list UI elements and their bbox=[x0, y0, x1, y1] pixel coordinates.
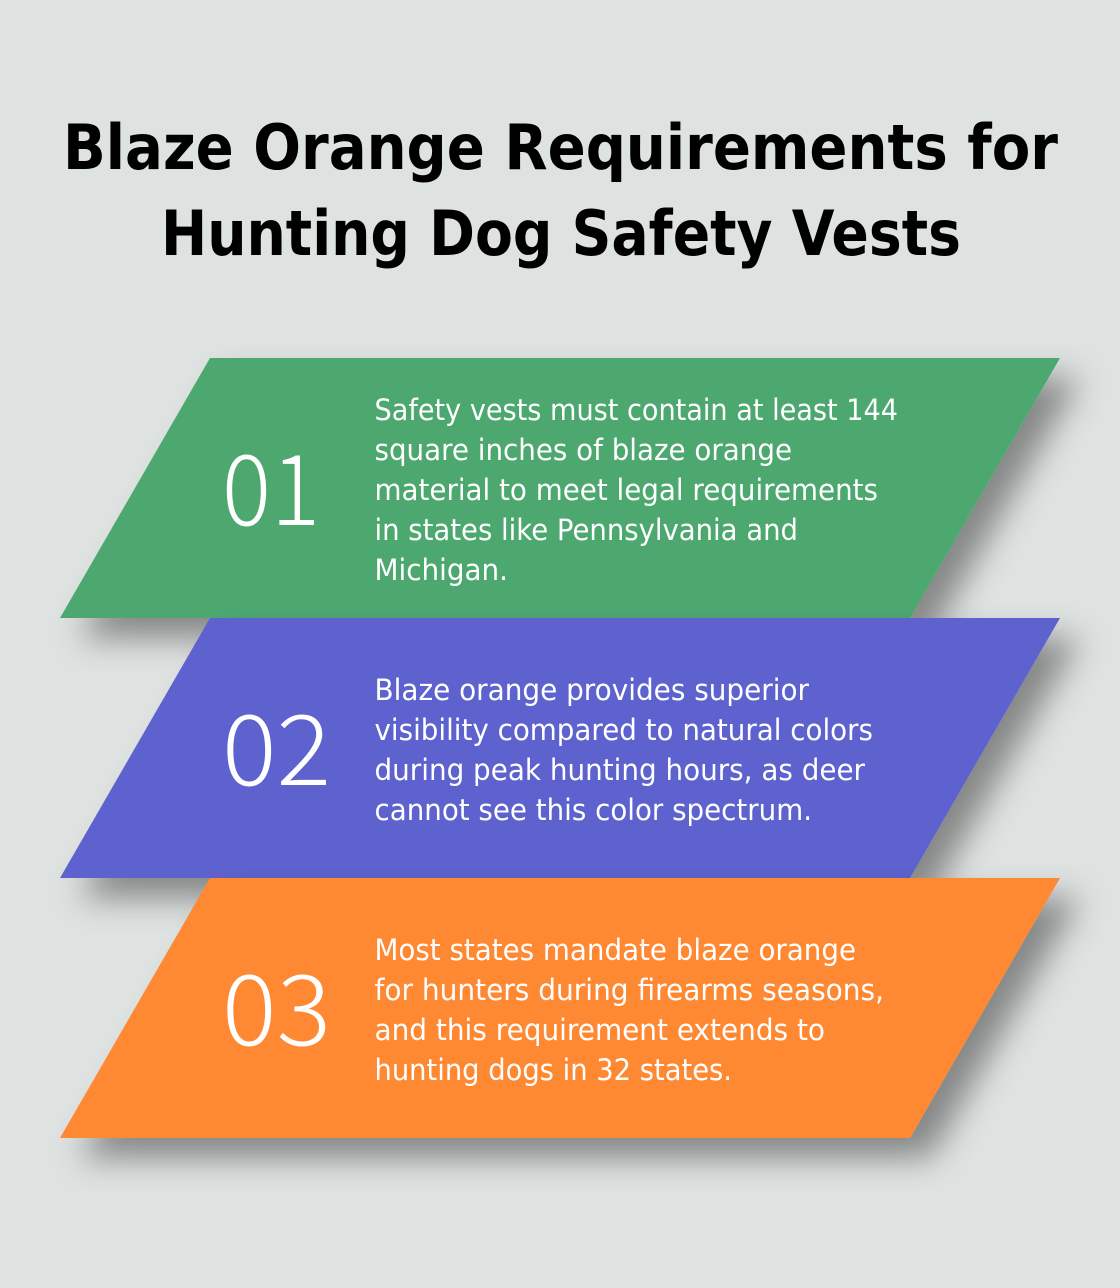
green parallelogram bbox=[60, 358, 1060, 618]
number 02: 02 bbox=[222, 672, 331, 814]
purple parallelogram bbox=[60, 618, 1060, 878]
step 01 text: Safety vests must contain at least 144 bbox=[374, 393, 898, 427]
number 03: 03 bbox=[222, 932, 331, 1074]
panel: step 03 bbox=[60, 878, 1060, 1138]
step 02 text: visibility compared to natural colors bbox=[374, 713, 873, 747]
step 01 text: Michigan. bbox=[374, 553, 508, 587]
orange parallelogram bbox=[60, 878, 1060, 1138]
step 01 text: square inches of blaze orange bbox=[374, 433, 792, 467]
step 03 text: and this requirement extends to bbox=[374, 1013, 825, 1047]
step 02 text: during peak hunting hours, as deer bbox=[374, 753, 865, 787]
step 03 text bbox=[374, 933, 884, 1087]
step 02 text: cannot see this color spectrum. bbox=[374, 793, 812, 827]
step 03 text: Most states mandate blaze orange bbox=[374, 933, 856, 967]
step 01 text: material to meet legal requirements bbox=[374, 473, 878, 507]
step 03 text: for hunters during firearms seasons, bbox=[374, 973, 884, 1007]
step 02 text bbox=[374, 673, 873, 827]
title bbox=[63, 111, 1058, 270]
step 01 text: in states like Pennsylvania and bbox=[374, 513, 798, 547]
panel: step 01 bbox=[60, 358, 1060, 618]
title: Hunting Dog Safety Vests bbox=[161, 197, 961, 270]
step 02 text: Blaze orange provides superior bbox=[374, 673, 809, 707]
panel: step 02 bbox=[60, 618, 1060, 878]
step 01 text bbox=[374, 393, 898, 587]
number 01: 01 bbox=[222, 412, 320, 554]
step 03 text: hunting dogs in 32 states. bbox=[374, 1053, 732, 1087]
